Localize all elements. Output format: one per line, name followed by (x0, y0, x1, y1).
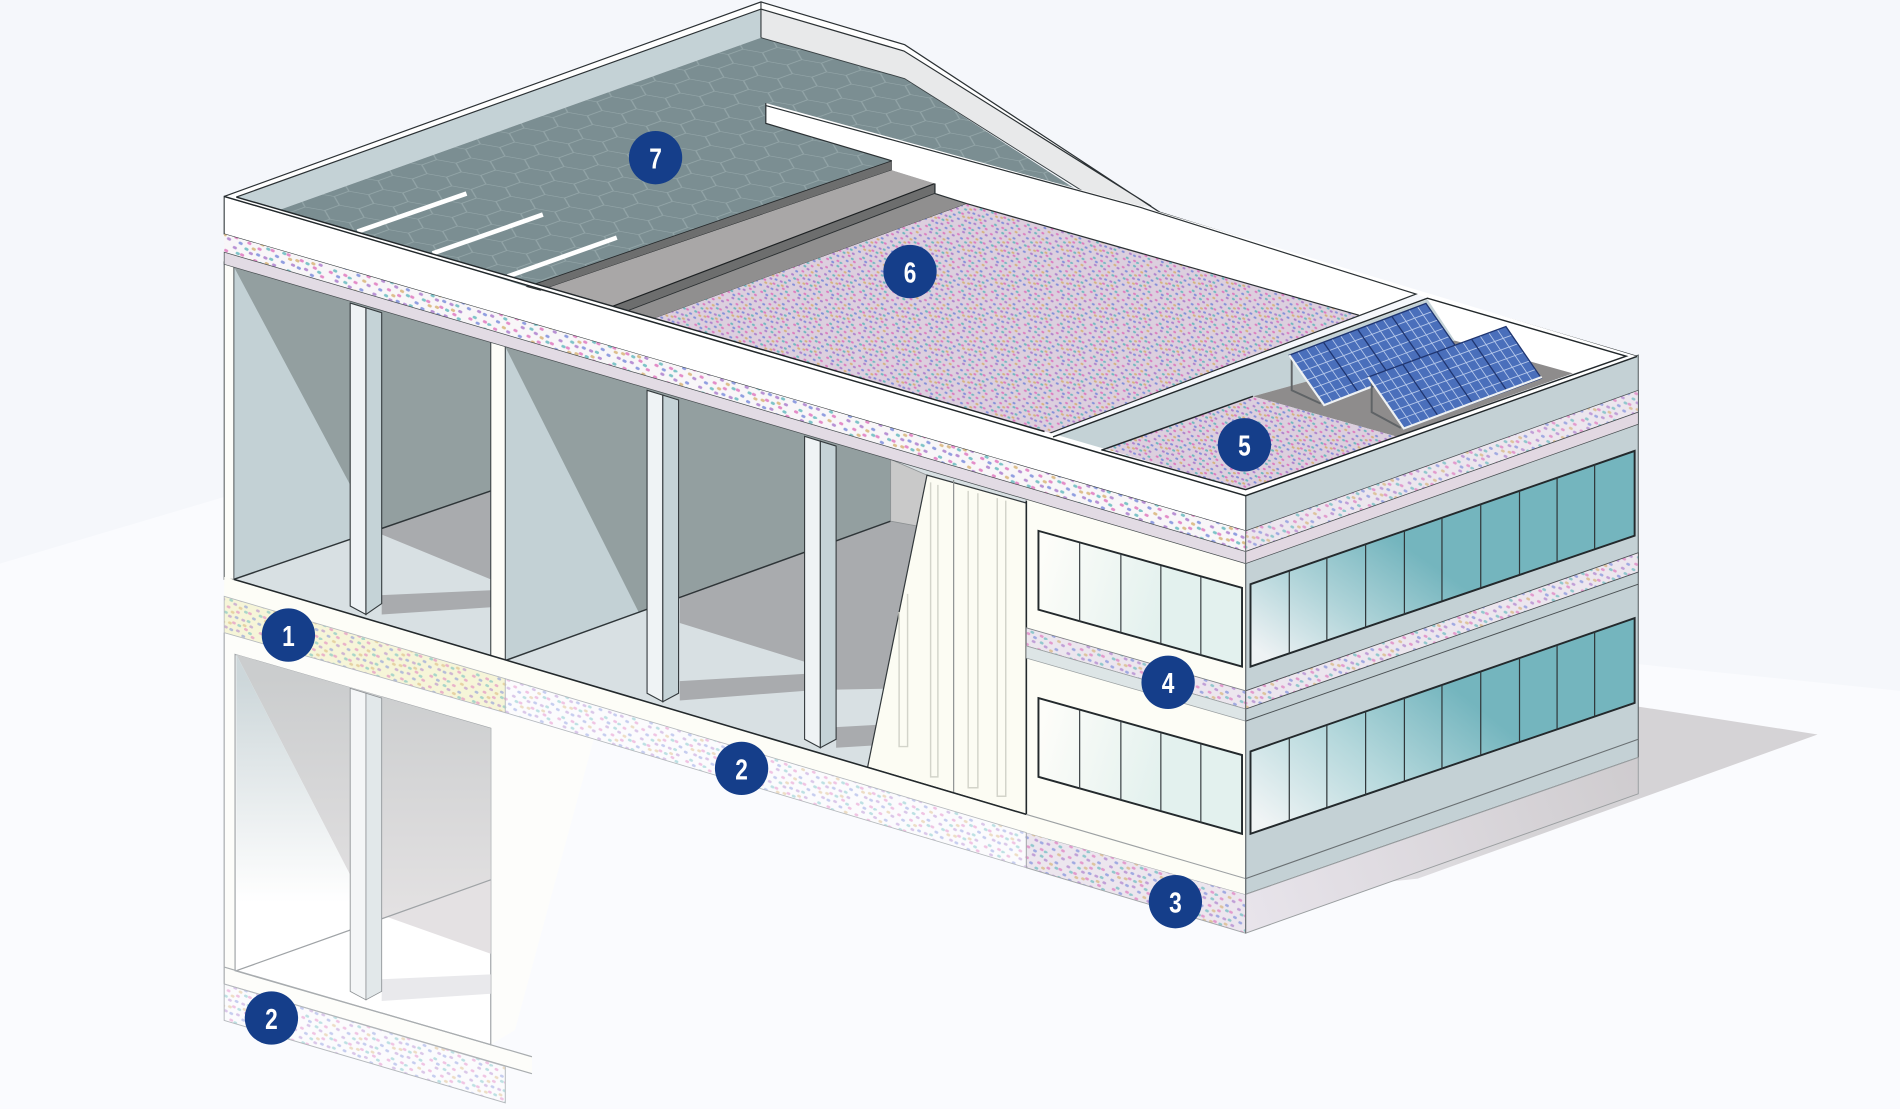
marker 2 left (245, 991, 298, 1045)
white rear curb (766, 103, 1637, 435)
blue-grey inner parapet (1053, 299, 1455, 450)
roof steps (527, 161, 967, 321)
floor bay 1 (234, 267, 491, 656)
step top 2 (623, 194, 967, 321)
ghost floor edge (224, 633, 532, 1074)
marker 1 (262, 608, 315, 662)
solar panel 1 (1289, 303, 1461, 405)
roof zone 7: hexagon pavers (280, 38, 1083, 287)
left end column (224, 262, 234, 579)
marker 1: 1 (282, 619, 295, 653)
ghost side wall (236, 654, 350, 971)
rear left parapet face (236, 9, 761, 210)
front window upper (1038, 531, 1242, 667)
pillar 3 (805, 436, 836, 748)
parapet white face (224, 196, 1246, 531)
marker 7 (629, 131, 682, 184)
right foundation (1246, 757, 1638, 933)
solar frame 1 (1292, 358, 1321, 404)
door panel (868, 475, 1026, 814)
insulation band under parapet (224, 234, 1246, 551)
solar panel 2 (1368, 327, 1541, 429)
back wall bay 1 (234, 267, 491, 579)
right wall (1246, 355, 1638, 894)
pillar 2 (647, 390, 679, 702)
front parapet (224, 196, 1246, 564)
insulation band 4 front (1026, 628, 1246, 709)
ghost pillar shadow (382, 974, 491, 1001)
side wall bay 2 (505, 347, 639, 661)
marker 3: 3 (1169, 886, 1182, 919)
right insulation band 4 (1246, 553, 1638, 709)
right facade (1246, 355, 1638, 933)
insulation band 2 (505, 679, 1026, 868)
floor line bay 1 (234, 491, 491, 579)
pillar shadow bay 1 (382, 590, 491, 614)
roof zone 5: speckled insulation (1101, 396, 1396, 490)
coping lines (224, 196, 1637, 496)
curb face (766, 103, 1637, 356)
pillar shadow bay 2b (836, 725, 879, 748)
ghost floor shade (382, 880, 491, 954)
pillar 1 (350, 303, 382, 614)
roof edge shade line (761, 38, 1083, 192)
step side 2 (608, 183, 935, 313)
step top 1 (540, 170, 935, 308)
pillar shadow bay 2a (680, 674, 805, 701)
ground shadow (1246, 707, 1818, 897)
structural column (491, 342, 505, 661)
marker 4 (1141, 656, 1195, 709)
marker 6: 6 (904, 256, 916, 289)
ghost back wall (236, 654, 491, 919)
ghost slab strip (224, 633, 532, 1074)
right window lower (1251, 618, 1635, 834)
ghost pillar (350, 688, 382, 1000)
white rear right roof (1427, 298, 1626, 373)
right window upper (1251, 451, 1635, 667)
rear white coping right (761, 2, 1160, 212)
front window lower (1038, 698, 1242, 834)
solar base (1253, 341, 1573, 436)
rear white coping left (224, 2, 761, 197)
rear right parapet face (761, 9, 1151, 207)
marker 3 (1149, 875, 1202, 928)
floor shade bay 2 (680, 521, 917, 690)
roof white markings (357, 194, 617, 276)
rear outline (224, 2, 1637, 356)
ghost window opening (235, 654, 491, 1045)
side wall bay 1 (234, 267, 350, 579)
solar panels (1289, 303, 1542, 429)
marker 4: 4 (1162, 666, 1175, 700)
floor line bay 2 (505, 521, 891, 661)
end wall (891, 459, 927, 526)
step side 1 (527, 161, 892, 290)
white coping front and right (224, 196, 1637, 496)
light cone (491, 710, 594, 1045)
solar frame 2 (1372, 383, 1401, 428)
insulation band 3 front (1026, 833, 1246, 933)
floor bay 2 (505, 347, 1026, 814)
marker 5 (1218, 418, 1271, 471)
right insulation band top (1246, 390, 1638, 551)
curb lines (766, 103, 1416, 435)
marker 2 right (715, 742, 768, 795)
lilac band (224, 252, 1246, 564)
marker 5: 5 (1238, 429, 1251, 462)
back wall bay 2 (505, 347, 891, 661)
insulation band 1 (224, 596, 505, 713)
rear walls (224, 2, 1637, 356)
floor slab edge (224, 577, 1026, 833)
grey ledge (1026, 646, 1246, 721)
ghost floor line (236, 880, 491, 971)
marker 7: 7 (649, 142, 662, 175)
marker 6 (883, 245, 937, 298)
cream front wall (1026, 498, 1246, 894)
insulation band 2 lower (224, 984, 505, 1103)
ghost lower storey (224, 633, 594, 1074)
marker 2 left: 2 (265, 1002, 278, 1036)
right lilac band (1246, 412, 1638, 564)
interior upper storey bay 1 (234, 267, 491, 656)
floor shade bay 1 (382, 491, 491, 579)
marker 2 right: 2 (735, 753, 748, 786)
roof zone 6: speckled insulation (648, 204, 1359, 435)
interior upper storey bay 2 (505, 347, 1026, 814)
